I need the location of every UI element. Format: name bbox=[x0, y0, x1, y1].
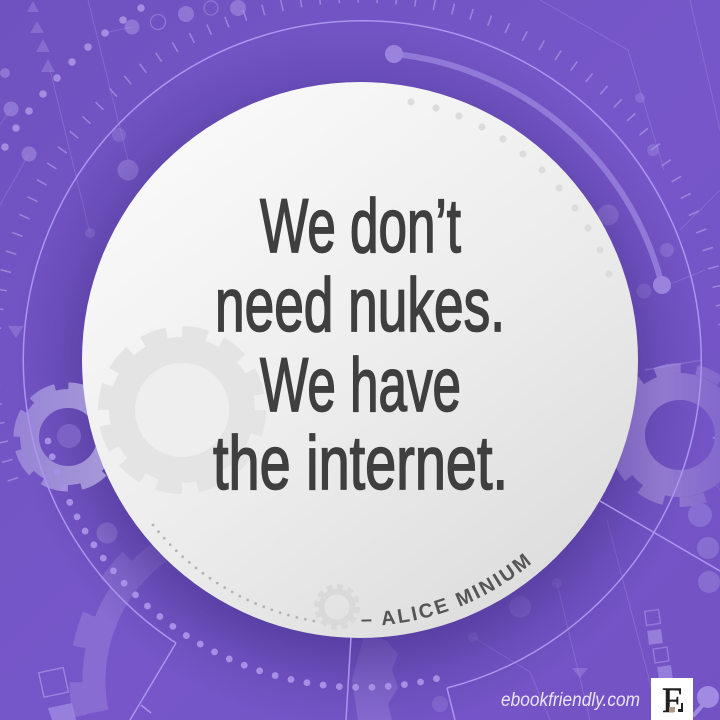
gear right bbox=[613, 368, 720, 502]
background outlined circles bbox=[150, 1, 218, 30]
small logo line circle bottom right bbox=[693, 686, 719, 716]
dotted arc bottom left on disc bbox=[153, 525, 314, 621]
large gear bottom-left bbox=[77, 504, 312, 716]
gear on disc: large bbox=[105, 333, 259, 487]
background triangles bbox=[8, 1, 588, 678]
squares bottom-right bbox=[645, 610, 673, 681]
gear left bbox=[18, 387, 118, 487]
author arc guide bbox=[361, 556, 540, 626]
quote text: We have bbox=[260, 343, 461, 428]
quote text: need nukes. bbox=[215, 263, 505, 348]
gear on disc: small bbox=[316, 586, 358, 628]
dotted arc top right on disc bbox=[407, 98, 613, 278]
background dots top-left bbox=[1, 4, 145, 151]
tick ring arc bbox=[0, 0, 720, 480]
quote text bbox=[213, 184, 508, 506]
dotted arc bottom bbox=[48, 441, 443, 687]
gear on disc: hub bbox=[135, 363, 229, 457]
white disc bbox=[82, 82, 638, 638]
quote text: We don’t bbox=[260, 184, 461, 269]
site name: ebookfriendly.com bbox=[501, 690, 640, 711]
author credit on curve: – ALICE MINIUM bbox=[361, 553, 531, 626]
disc gears bbox=[105, 333, 358, 628]
logo badge: F bbox=[662, 680, 682, 720]
squares bottom-left bbox=[39, 668, 76, 720]
thick progress arc with end dots bbox=[385, 45, 671, 294]
quote text: the internet. bbox=[213, 421, 508, 506]
logo badge bbox=[651, 678, 693, 720]
gear fragment bottom-center bbox=[352, 636, 398, 720]
gear left inner hub bbox=[57, 424, 81, 448]
